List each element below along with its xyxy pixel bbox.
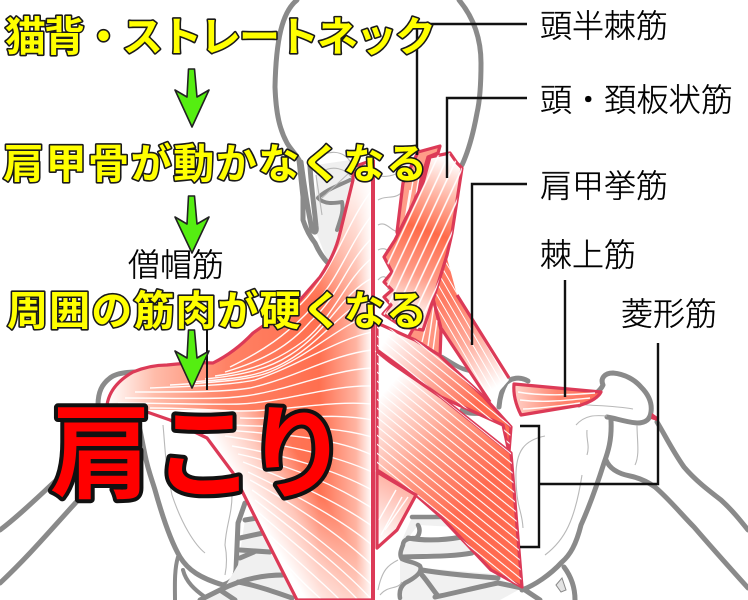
heading: step 1: 猫背・ストレートネック (5, 14, 436, 60)
heading: step 2: 肩甲骨が動かなくなる (3, 141, 427, 187)
leader: levator scapulae (472, 184, 527, 345)
heading: step 3: 周囲の筋肉が硬くなる (7, 288, 427, 334)
label: supraspinatus: 棘上筋 (540, 237, 636, 273)
muscle: trapezius (100, 160, 375, 600)
left arm (0, 475, 62, 530)
heading: result: 肩こり (50, 398, 348, 512)
label: rhomboid: 菱形筋 (621, 296, 717, 332)
leader: semispinalis (417, 24, 527, 155)
label: semispinalis: 頭半棘筋 (540, 8, 668, 44)
muscle: levator scapulae (432, 258, 509, 402)
label: splenius: 頭・頚板状筋 (540, 82, 733, 118)
label: levator scapulae: 肩甲挙筋 (540, 168, 668, 204)
muscle: rhomboid tip (651, 413, 659, 421)
label: trapezius: 僧帽筋 (128, 247, 224, 283)
jaw and neck left (316, 160, 353, 262)
muscle: lower serratus (377, 472, 416, 548)
rib band upper right (442, 357, 490, 415)
scapula right and shoulder (499, 373, 651, 590)
muscle: spine line (371, 160, 375, 600)
muscle: supraspinatus (514, 384, 601, 415)
muscle: rhomboid minor (377, 323, 511, 452)
ribs centre (400, 517, 522, 600)
muscle: rhomboid major (377, 353, 522, 587)
fibres (118, 190, 372, 411)
right arm (606, 460, 748, 588)
leader: supraspinatus (564, 280, 566, 397)
muscle: splenius (383, 153, 462, 330)
neck vertebrae (375, 170, 402, 290)
muscle: deep strips (408, 295, 441, 358)
leader: splenius (447, 98, 527, 178)
arrow: step 2 to 3 (175, 196, 209, 253)
muscle: semispinalis capitis (397, 146, 440, 258)
leader: rhomboid (539, 343, 658, 484)
ribs left (205, 518, 297, 600)
shoulder left (98, 400, 238, 585)
leader: trapezius (206, 328, 208, 390)
bracket: rhomboid (520, 426, 539, 547)
arrow: step 1 to 2 (175, 69, 209, 127)
arrow: step 3 to result (175, 330, 209, 388)
head outline (275, 0, 299, 160)
